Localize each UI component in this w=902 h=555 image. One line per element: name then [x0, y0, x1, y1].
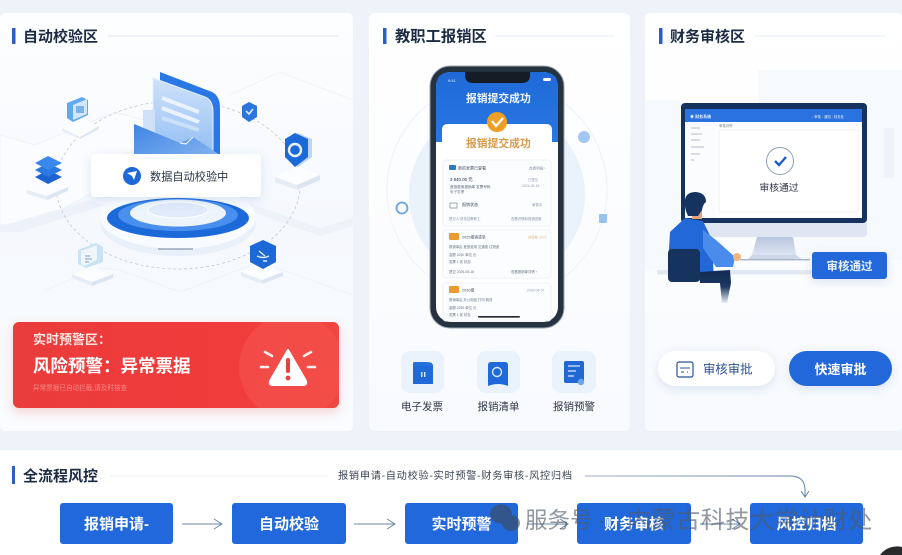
heading: 全流程风控: 全流程风控	[23, 467, 98, 485]
label card: 数据自动校验中	[91, 154, 261, 197]
phone: submission success screen: 9:41	[448, 78, 457, 83]
receipt card 2: 金额 2250 单位 元	[449, 252, 477, 257]
alert card: 实时预警区: 异常票据已自动拦截,请及时核查	[33, 383, 128, 392]
background tint blocks	[645, 70, 902, 270]
receipt card 1: 查看明细 ›	[529, 166, 546, 170]
receipt card 2	[443, 230, 551, 278]
watermark: 服务号 内蒙古科技大学计财处: ·	[598, 508, 606, 533]
receipt card 1	[443, 160, 551, 226]
alert card: 实时预警区: 实时预警区：	[33, 332, 111, 347]
arrow: to 风控归档	[585, 476, 809, 497]
step: 财务审核	[577, 503, 691, 544]
step: 自动校验: 自动校验	[259, 515, 319, 533]
icon: orange check badge	[487, 112, 507, 132]
icon: hex badge	[250, 240, 276, 269]
receipt card 1: 电子发票	[450, 189, 465, 194]
receipt card 1: 已提交	[528, 177, 539, 182]
monitor: approval screen: ◉ 财务系统	[690, 113, 711, 119]
receipt card 1: 新的发票已查看	[458, 164, 486, 170]
receipt card 1: 提交人:财务处教职工	[449, 216, 481, 221]
step: 实时预警: 实时预警	[431, 515, 492, 533]
document and folder	[134, 72, 220, 160]
heading: 自动校验区	[12, 28, 338, 46]
receipt card 3: 金额 2250 单位 元	[449, 305, 477, 310]
receipt card 2: 提交 2025-05-18	[449, 269, 474, 274]
feature: 报销清单	[477, 351, 520, 413]
monitor: approval screen: 审核通过	[759, 181, 799, 194]
phone: submission success screen: 报销提交成功	[466, 91, 531, 105]
panel: 全流程风控	[0, 450, 902, 555]
receipt card 3	[443, 283, 551, 321]
heading: 自动校验区: 自动校验区	[23, 28, 98, 46]
receipt card 3: 2030-04-07	[527, 288, 544, 292]
feature: 报销预警	[552, 351, 596, 413]
monitor: approval screen: 审核详情	[719, 123, 733, 128]
heading: 财务审核区	[659, 28, 885, 46]
feature: 报销清单: 报销清单	[478, 400, 520, 413]
check circle	[766, 148, 794, 174]
monitor chin and stand	[681, 223, 867, 260]
alert card: 实时预警区: 风险预警：异常票据	[33, 356, 190, 376]
receipt card 3: 报销事由 办公用品 打印 耗材	[449, 297, 493, 302]
button: 审核审批: 审核审批	[703, 362, 753, 376]
receipt card 2: 查看报销单详情 ›	[511, 269, 537, 274]
icon: id card	[67, 97, 88, 122]
receipt card 2: 发票 1 张 状态	[449, 259, 471, 264]
label card: 数据自动校验中: 数据自动校验中	[150, 170, 228, 184]
desk	[657, 270, 817, 274]
receipt card 2: 报销事由 差旅费用 交通费 住宿费	[449, 244, 500, 249]
button: 快速审批: 快速审批	[814, 362, 867, 377]
watermark: 服务号 内蒙古科技大学计财处: 内蒙古科技大学计财处	[627, 507, 873, 534]
receipt card 1: 查看详情和报销进度	[511, 216, 542, 221]
pedestals	[27, 119, 320, 286]
receipt card 3: 发票 1 张 状态	[449, 312, 471, 317]
heading: 教职工报销区	[383, 28, 615, 46]
phone: submission success screen	[430, 66, 564, 328]
heading: 全流程风控	[12, 466, 328, 485]
panel: 自动校验区	[0, 13, 353, 431]
decorative halo with floating icons	[387, 80, 607, 300]
badge: 审核通过	[812, 252, 887, 279]
alert card: 实时预警区	[9, 322, 343, 416]
receipt card 1: 差旅费用报销单 发票号码	[450, 184, 491, 189]
panel: 教职工报销区	[369, 13, 630, 431]
watermark: 服务号 内蒙古科技大学计财处	[490, 504, 873, 534]
arrow: step 4 to 5	[700, 519, 740, 529]
heading: 教职工报销区: 教职工报销区	[395, 28, 487, 46]
step: 报销申请: 报销申请-	[84, 515, 149, 533]
heading: 财务审核区: 财务审核区	[670, 28, 745, 46]
receipt card 1: 审核中	[532, 202, 543, 207]
receipt card 1: 2024-05-18	[522, 184, 539, 188]
button: 审核审批	[658, 351, 775, 386]
icon: warning triangle	[261, 350, 315, 385]
step: 风控归档	[750, 503, 863, 544]
arrow: step 3 to 4	[527, 519, 568, 529]
icon: pale card	[78, 243, 103, 268]
dashed orbit	[56, 101, 300, 269]
feature: 报销预警: 报销预警	[553, 400, 595, 413]
feature: 电子发票	[401, 351, 444, 413]
feature: 电子发票: 电子发票	[401, 400, 443, 413]
receipt card 2: 待审核 2025	[528, 234, 547, 240]
receipt card 1: 报销状态	[462, 201, 478, 207]
person	[668, 192, 741, 303]
step: 报销申请	[60, 503, 173, 544]
illustration: data verification platform	[0, 72, 353, 295]
button: 快速审批	[789, 351, 892, 386]
corner: dark circle	[880, 546, 902, 555]
home indicator	[478, 316, 520, 318]
icon: data stack	[35, 156, 62, 184]
arrow: step 1 to 2	[182, 519, 222, 529]
icon: gear shield	[285, 133, 312, 167]
panel: 财务审核区	[645, 13, 902, 431]
phone notch	[465, 72, 530, 83]
step: 实时预警	[405, 503, 518, 544]
white success card	[442, 124, 552, 160]
platform base	[100, 185, 256, 256]
step: 自动校验	[232, 503, 346, 544]
icon: chat bubbles	[490, 504, 520, 531]
step: 风控归档: 风控归档	[776, 515, 837, 533]
arrow: step 2 to 3	[354, 519, 395, 529]
receipt card 2: 2025报销清单	[462, 234, 486, 240]
step: 财务审核: 财务审核	[604, 515, 664, 533]
caption: process summary: 报销申请-自动校验-实时预警-财务审核-风控归档	[338, 469, 572, 482]
receipt card 1: 3 840.00 元	[450, 177, 473, 183]
monitor: approval screen: ◦ 审核 ◦ 通知 ◦ 财务处	[812, 114, 845, 119]
badge: 审核通过: 审核通过	[826, 259, 873, 273]
watermark: 服务号 内蒙古科技大学计财处: 服务号	[525, 508, 593, 533]
monitor: approval screen	[657, 103, 867, 303]
phone: submission success screen: 报销提交成功	[466, 136, 531, 150]
icon: small shield	[242, 102, 257, 122]
receipt card 3: 2030报	[462, 288, 474, 292]
